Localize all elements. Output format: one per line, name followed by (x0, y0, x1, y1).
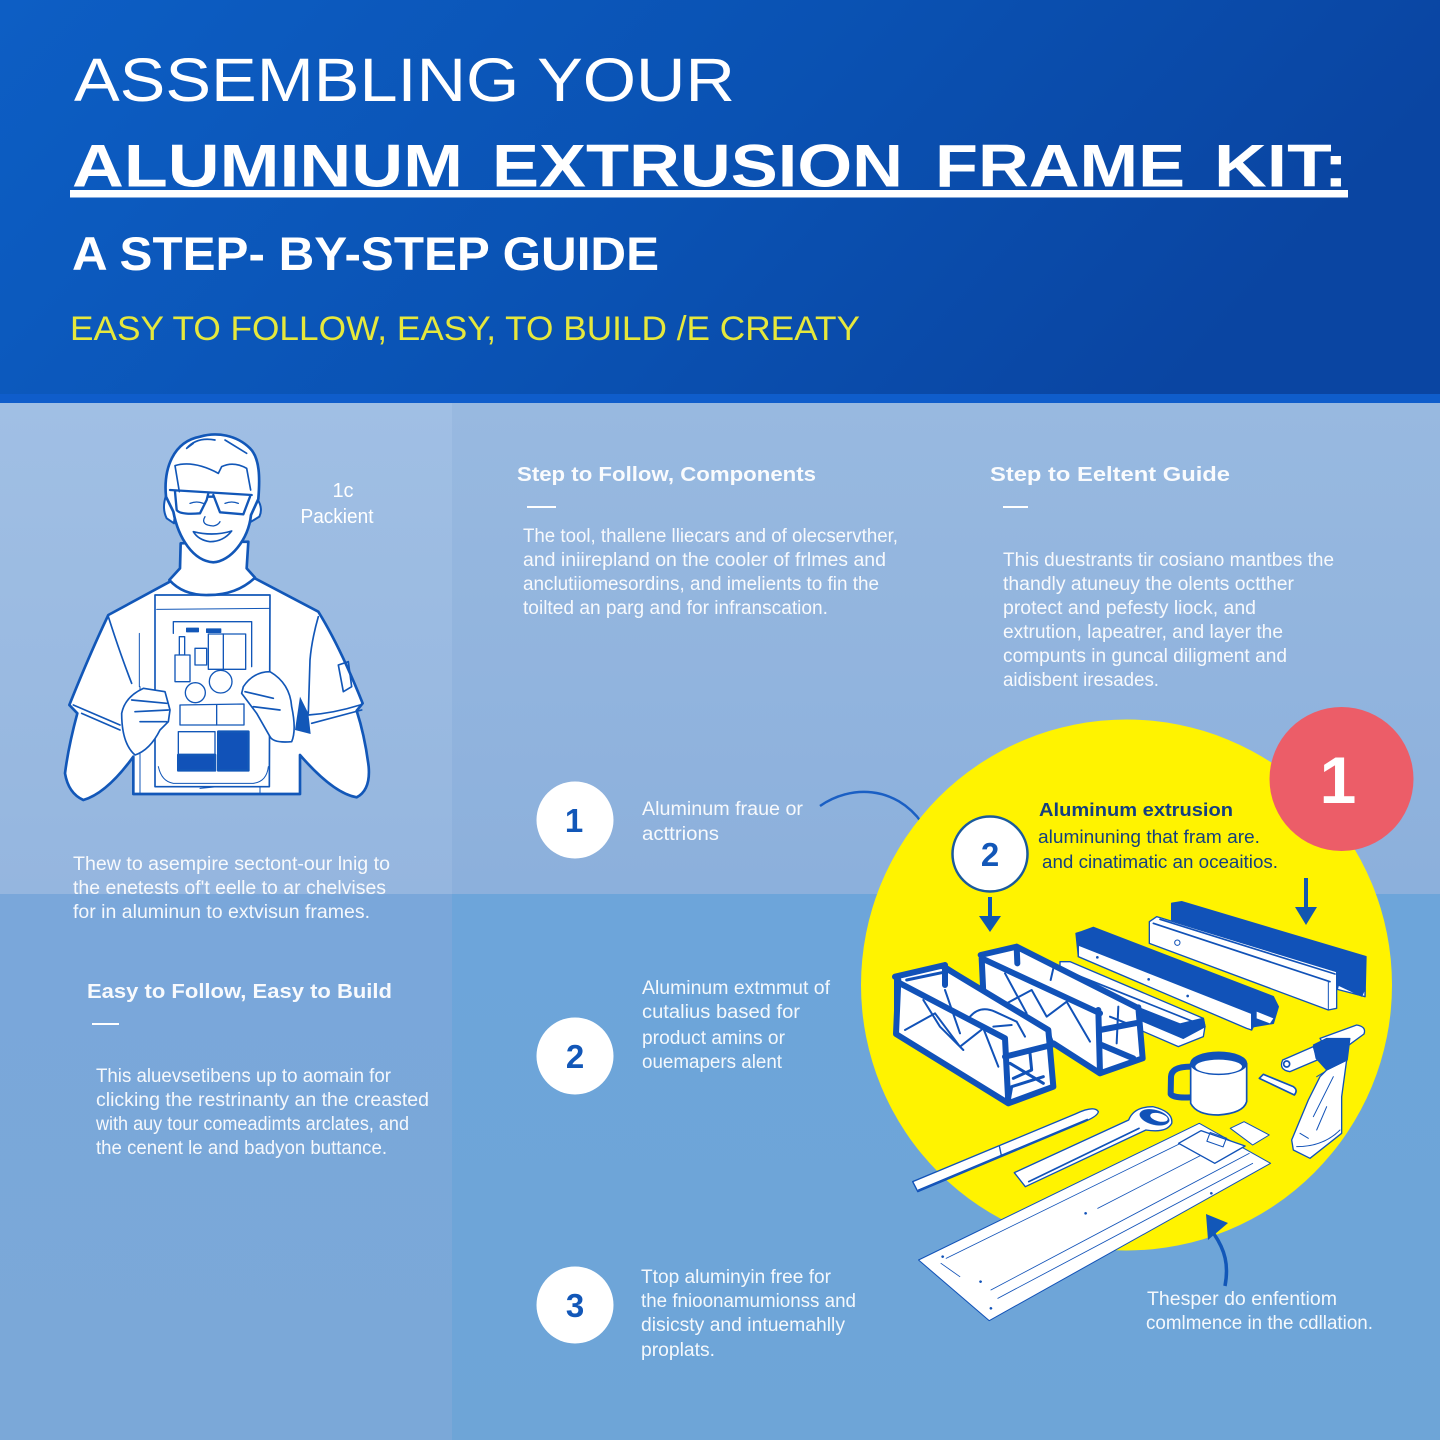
text block: intro: the enetests of't eelle to ar chelvises (73, 878, 386, 899)
arrow: curved to plate (1206, 1214, 1228, 1286)
text block: guide: thandly atuneuy the olents octther (1003, 574, 1295, 595)
arrow: badge 2 down (979, 897, 1001, 932)
badge 2: 2 (981, 836, 999, 873)
smile (193, 531, 232, 542)
step 3 text: Ttop aluminyin free for (641, 1267, 832, 1288)
tagline: EASY TO FOLLOW, EASY, TO BUILD /E CREATY (70, 310, 860, 348)
text block: guide: compunts in guncal diligment and (1003, 646, 1287, 667)
label: packet: Packient (300, 506, 374, 528)
step 1 badge (536, 782, 614, 858)
truss frame front (895, 965, 1053, 1103)
step 3 badge (536, 1266, 614, 1344)
hair line (175, 439, 251, 492)
text block: easy to follow: the cenent le and badyon buttance. (96, 1138, 387, 1159)
text block: components: anclutiiomesordins, and imelients to fin the (523, 574, 879, 595)
step 3 text (641, 1267, 856, 1361)
board (155, 595, 270, 787)
text block: easy to follow: with auy tour comeadimts arclates, and (95, 1114, 409, 1135)
step 2 text: Aluminum extmmut of (642, 978, 831, 999)
step 1 text: acttrions (642, 824, 719, 845)
small block (1230, 1122, 1269, 1145)
text block: components: The tool, thallene lliecars and of olecservther, (523, 526, 898, 547)
beam front (1060, 962, 1205, 1047)
head (166, 434, 259, 562)
arrow: step 1 to circle (820, 792, 922, 823)
arrow: right down (1295, 878, 1317, 925)
text block: components: toilted an parg and for infranscation. (523, 598, 828, 619)
step 2 badge: 2 (566, 1038, 584, 1075)
sleeves (73, 617, 362, 730)
yellow circle (861, 720, 1392, 1250)
caption: bottom right (1146, 1289, 1373, 1334)
text block: guide: aidisbent iresades. (1003, 670, 1159, 691)
text block: guide: extrution, lapeatrer, and layer the (1003, 622, 1283, 643)
text block: easy to follow (95, 1066, 429, 1159)
callout text (1038, 799, 1278, 872)
panel: background quadrants (0, 403, 1440, 1440)
text block: guide: protect and pefesty liock, and (1003, 598, 1256, 619)
step 2 text (642, 978, 831, 1073)
illustration: man holding kit (65, 434, 369, 800)
badge 2 (952, 816, 1028, 892)
caption: bottom right: comlmence in the cdllation. (1146, 1313, 1373, 1334)
step 3 text: the fnioonamumionss and (641, 1291, 856, 1312)
text block: intro: for in aluminun to extvisun frames. (73, 902, 370, 923)
step 2 badge (536, 1018, 614, 1094)
red badge: 1 (1320, 743, 1356, 817)
step 2 text: cutalius based for (642, 1002, 801, 1023)
text block: intro (73, 854, 390, 923)
title line 2: FRAME (935, 132, 1185, 200)
label: packet (300, 480, 374, 528)
caption: bottom right: Thesper do enfentiom (1147, 1289, 1337, 1310)
heading: components: Step to Follow, Components (517, 463, 816, 486)
text block: easy to follow: This aluevsetibens up to aomain for (96, 1066, 392, 1087)
truss frame rear (980, 947, 1143, 1073)
title line 2: EXTRUSION (492, 132, 903, 200)
step 3 text: disicsty and intuemahlly (641, 1315, 846, 1336)
step 2 text: ouemapers alent (642, 1052, 783, 1073)
step 1 text: Aluminum fraue or (642, 799, 804, 820)
title line 2: ALUMINUM (72, 132, 463, 200)
step 3 text: proplats. (641, 1340, 715, 1361)
left hand (122, 688, 170, 755)
torch (1281, 1025, 1365, 1158)
mug (1171, 1052, 1247, 1115)
right hand (242, 672, 294, 742)
illustration: kit parts (895, 902, 1366, 1321)
neck and collar (169, 542, 255, 595)
callout text: aluminuning that fram are. (1038, 826, 1260, 847)
wrench (1014, 1106, 1172, 1187)
step 3 badge: 3 (566, 1287, 584, 1324)
body and shirt (65, 567, 369, 800)
blue blocks (178, 755, 215, 770)
beam back (1149, 902, 1366, 1010)
pin (1259, 1074, 1296, 1095)
eyes (190, 502, 238, 503)
text block: easy to follow: clicking the restrinanty an the creasted (96, 1090, 429, 1111)
nose (204, 517, 220, 526)
title line 2 (70, 132, 1348, 200)
beam middle (1076, 927, 1278, 1030)
callout text: and cinatimatic an oceaitios. (1042, 851, 1278, 872)
step 1 text (642, 799, 804, 845)
callout text: Aluminum extrusion (1039, 799, 1233, 820)
text block: components (523, 526, 898, 619)
panel: header banner (0, 0, 1440, 403)
step 1 badge: 1 (565, 802, 583, 839)
step 2 text: product amins or (642, 1028, 786, 1049)
text block: components: and iniirepland on the cooler of frlmes and (523, 550, 886, 571)
heading: easy to follow: Easy to Follow, Easy to Build (87, 980, 392, 1003)
ears (164, 495, 261, 523)
text block: intro: Thew to asempire sectont-our lnig to (73, 854, 390, 875)
label: packet: 1c (332, 480, 354, 502)
red badge (1270, 707, 1414, 851)
heading: guide: Step to Eeltent Guide (990, 463, 1230, 486)
text block: guide (1003, 550, 1334, 691)
title line 1: ASSEMBLING YOUR (74, 46, 735, 114)
base plate (919, 1123, 1271, 1321)
text block: guide: This duestrants tir cosiano mantbes the (1003, 550, 1334, 571)
rod (913, 1109, 1098, 1192)
glasses (170, 490, 252, 514)
board parts (173, 622, 252, 755)
title line 3: A STEP- BY-STEP GUIDE (72, 227, 659, 280)
shaded underarm (295, 697, 311, 734)
title line 2: KIT: (1214, 132, 1348, 200)
